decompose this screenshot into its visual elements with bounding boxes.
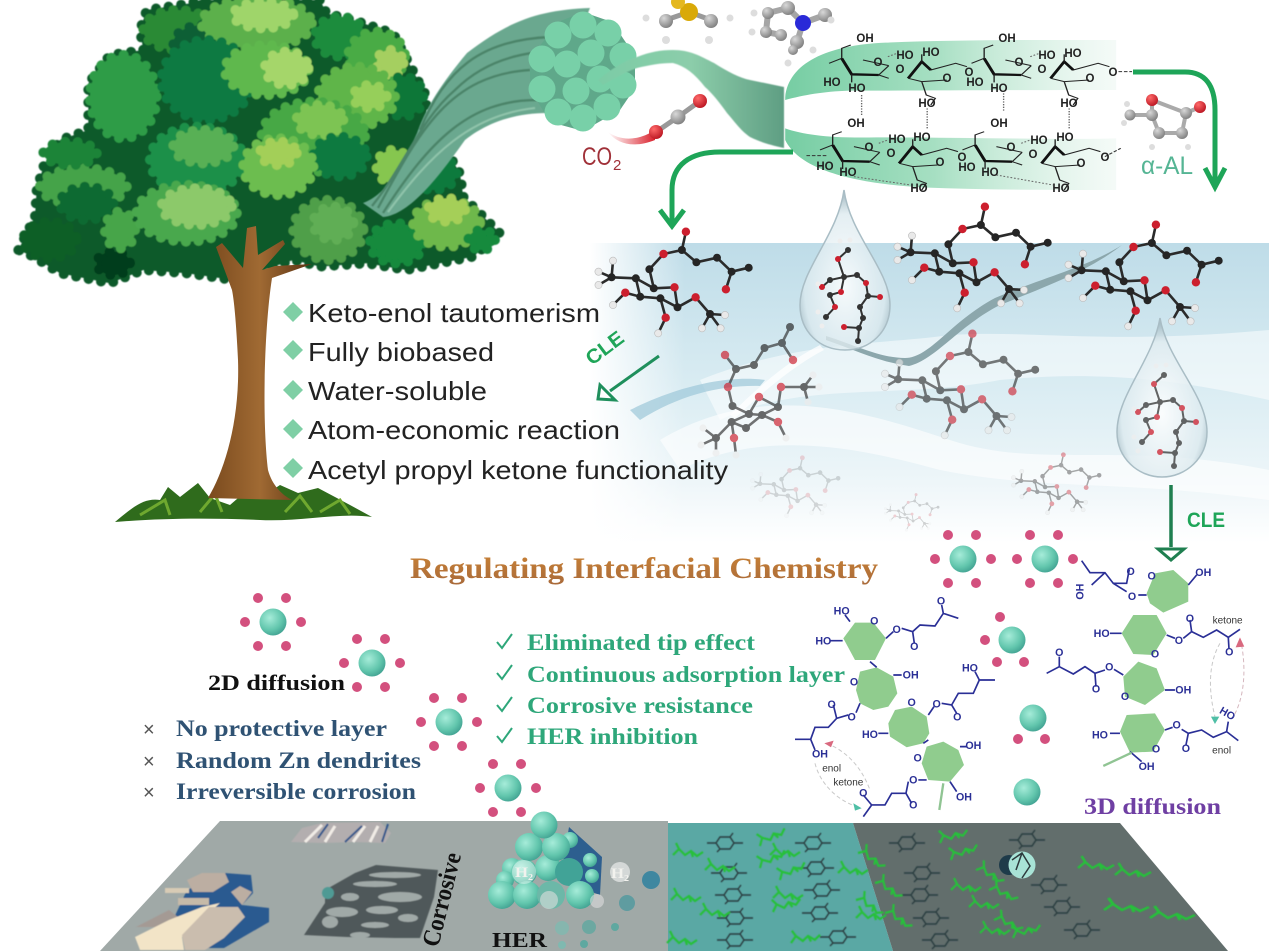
fibre tail from tree: [363, 8, 590, 217]
cellulose atom labels: HO: [922, 47, 940, 59]
2D diffusion label: 2D diffusion: [208, 670, 345, 695]
bare zinc section: [100, 821, 668, 951]
zinc sphere pyramid: [488, 812, 660, 949]
cellulose atom labels: OH: [847, 118, 865, 130]
cellulose atom labels: O: [896, 64, 905, 76]
CO2 subscript: 2: [613, 157, 621, 174]
left polymer chain: HO: [862, 729, 878, 741]
cellulose atom labels: O: [874, 57, 883, 69]
right polymer chain: O: [1128, 591, 1136, 603]
left polymer chain: O: [937, 596, 945, 608]
right polymer chain: O: [1105, 662, 1113, 674]
CLE arrow right: CLE: [1187, 509, 1225, 532]
cellulose atom labels: O: [865, 142, 874, 154]
positive list: Corrosive resistance: [527, 693, 753, 718]
right polymer chain: O: [1092, 683, 1100, 695]
left polymer chain: O: [850, 677, 858, 689]
cellulose atom labels: HO: [981, 167, 999, 179]
cellulose atom labels: HO: [990, 83, 1008, 95]
cellulose atom labels: [816, 33, 1118, 195]
cellulose atom labels: O: [1015, 57, 1024, 69]
left polymer chain: OH: [903, 669, 919, 681]
CLE arrow left: CLE: [582, 327, 629, 370]
left polymer chain: HO: [962, 662, 978, 674]
cellulose atom labels: O: [1029, 149, 1038, 161]
fibre bundle: [528, 12, 636, 132]
zinc ion on surface: [999, 852, 1036, 878]
nitrogen molecule: [748, 1, 834, 66]
cellulose atom labels: HO: [896, 50, 914, 62]
cellulose atom labels: OH: [856, 33, 874, 45]
adsorption layer section: [668, 823, 893, 951]
left polymer chain: O: [848, 711, 856, 723]
3D diffusion label: 3D diffusion: [1084, 794, 1221, 819]
left polymer chain: O: [910, 641, 918, 653]
left polymer chain: HO: [834, 606, 850, 618]
right polymer chain: OH: [1195, 567, 1211, 579]
corrosive label: Corrosive: [418, 850, 467, 949]
right polymer chain: OH: [1139, 761, 1155, 773]
feature list: [283, 298, 728, 485]
cellulose atom labels: HO: [888, 134, 906, 146]
cellulose atom labels: O: [1101, 152, 1110, 164]
left polymer chain: OH: [812, 749, 828, 761]
right polymer chain: O: [1186, 613, 1194, 625]
fibre ribbon to cellulose: [598, 50, 784, 148]
right polymer chain: HO: [1092, 729, 1108, 741]
positive list: Eliminated tip effect: [527, 630, 755, 655]
left polymer chain: OH: [956, 792, 972, 804]
left polymer chain: O: [933, 699, 941, 711]
green arrow to CLE left: [660, 152, 793, 226]
left polymer chain: [795, 596, 995, 817]
feature text: [308, 298, 728, 485]
CLE arrow right: [1158, 485, 1225, 560]
zinc ion clusters: [240, 530, 1078, 817]
H2 bubble labels: H₂: [611, 866, 630, 882]
cellulose atom labels: OH: [998, 33, 1016, 45]
cellulose atom labels: O: [887, 148, 896, 160]
left polymer chain: O: [909, 799, 917, 811]
CLE arrow left: [582, 327, 659, 400]
H2 bubble labels: [515, 865, 630, 882]
corroded zinc patch: [304, 865, 438, 938]
negative list: Irreversible corrosion: [176, 779, 416, 804]
tree trunk: [208, 226, 312, 500]
right polymer chain: OH: [1175, 685, 1191, 697]
feature text: Water-soluble: [308, 376, 487, 406]
rotated grey molecule: [697, 323, 823, 459]
CO2 label: CO: [582, 143, 612, 171]
positive list: [497, 630, 845, 749]
right polymer chain: O: [1055, 647, 1063, 659]
negative list: No protective layer: [176, 716, 387, 741]
right polymer chain: O: [1175, 635, 1183, 647]
right polymer chain: O: [1126, 566, 1135, 578]
right polymer chain: O: [1121, 691, 1129, 703]
section title: Regulating Interfacial Chemistry: [410, 552, 878, 585]
cellulose atom labels: HO: [816, 161, 834, 173]
left polymer chain: O: [893, 624, 901, 636]
cellulose atom labels: HO: [1030, 135, 1048, 147]
cellulose atom labels: O: [936, 157, 945, 169]
right polymer chain: O: [1182, 743, 1190, 755]
left polymer chain: OH: [965, 740, 981, 752]
negative list: Random Zn dendrites: [176, 748, 421, 773]
cellulose atom labels: HO: [823, 77, 841, 89]
feature text: Atom-economic reaction: [308, 415, 620, 445]
left polymer chain: O: [908, 697, 916, 709]
right polymer chain: O: [1147, 570, 1156, 582]
cellulose atom labels: HO: [1052, 183, 1070, 195]
cellulose atom labels: O: [1038, 64, 1047, 76]
cellulose atom labels: HO: [910, 183, 928, 195]
cellulose atom labels: O: [943, 73, 952, 85]
diamond bullets: [283, 302, 303, 478]
right polymer chain: OH: [1074, 584, 1086, 600]
cellulose atom labels: O: [1077, 158, 1086, 170]
CLE molecules: [595, 202, 1223, 531]
cellulose atom labels: HO: [1038, 50, 1056, 62]
H2 bubble labels: H₂: [515, 865, 534, 881]
feature text: Acetyl propyl ketone functionality: [308, 455, 728, 485]
cellulose atom labels: HO: [1056, 132, 1074, 144]
tree canopy: [18, 0, 500, 283]
left polymer chain: enol: [822, 763, 841, 774]
negative list: ×: [143, 782, 155, 804]
left polymer chain: ketone: [833, 778, 864, 789]
CO2 molecule: [608, 94, 707, 144]
alpha-AL label: α-AL: [1141, 152, 1193, 180]
negative list: ×: [143, 751, 155, 773]
adsorbed polymer lattice: [667, 821, 1195, 949]
right polymer chain: O: [1152, 744, 1160, 756]
cellulose atom labels: HO: [958, 162, 976, 174]
tree: [18, 0, 500, 522]
feature text: Keto-enol tautomerism: [308, 298, 600, 328]
sulfur molecule: [642, 0, 734, 44]
right polymer chain: [1047, 561, 1244, 773]
green arrow to CLE right: [1133, 72, 1225, 187]
alpha-AL molecule: [1121, 94, 1206, 150]
left polymer chain: O: [953, 711, 961, 723]
grass: [115, 483, 372, 522]
right polymer chain: HO: [1094, 628, 1110, 640]
cellulose atom labels: HO: [848, 83, 866, 95]
left polymer chain: O: [909, 774, 917, 786]
cellulose atom labels: O: [965, 67, 974, 79]
dark section: [853, 823, 1228, 951]
cellulose atom labels: HO: [918, 98, 936, 110]
cellulose atom labels: HO: [1060, 98, 1078, 110]
green bands and bonds: [785, 40, 1132, 190]
right polymer chain: ketone: [1213, 615, 1243, 626]
cellulose atom labels: HO: [966, 77, 984, 89]
water drop two: [1117, 318, 1207, 477]
water drop one: [800, 190, 890, 350]
cellulose atom labels: OH: [990, 118, 1008, 130]
negative list: [143, 716, 421, 804]
cellulose atom labels: O: [1086, 73, 1095, 85]
cellulose atom labels: HO: [913, 132, 931, 144]
left polymer chain: O: [914, 752, 922, 764]
cellulose chains: [785, 33, 1132, 195]
zinc anode surface: [100, 821, 1228, 951]
right polymer chain: O: [1151, 648, 1159, 660]
left polymer chain: HO: [815, 636, 831, 648]
right polymer chain: HO: [1217, 705, 1237, 723]
right polymer chain: enol: [1212, 745, 1231, 756]
cellulose atom labels: O: [1007, 142, 1016, 154]
right polymer chain: O: [1172, 719, 1181, 731]
feature text: Fully biobased: [308, 337, 494, 367]
water background panel: [590, 243, 1269, 543]
left polymer chain: O: [859, 788, 867, 800]
positive list: Continuous adsorption layer: [527, 662, 845, 687]
cellulose atom labels: O: [958, 152, 967, 164]
zinc dendrites: [135, 822, 391, 950]
cellulose atom labels: HO: [1064, 48, 1082, 60]
positive list: HER inhibition: [527, 724, 698, 749]
negative list: ×: [143, 719, 155, 741]
left polymer chain: O: [870, 616, 878, 628]
left polymer chain: O: [828, 699, 836, 711]
cellulose atom labels: O: [1109, 67, 1118, 79]
cellulose atom labels: HO: [839, 167, 857, 179]
right polymer chain: O: [1225, 647, 1233, 659]
